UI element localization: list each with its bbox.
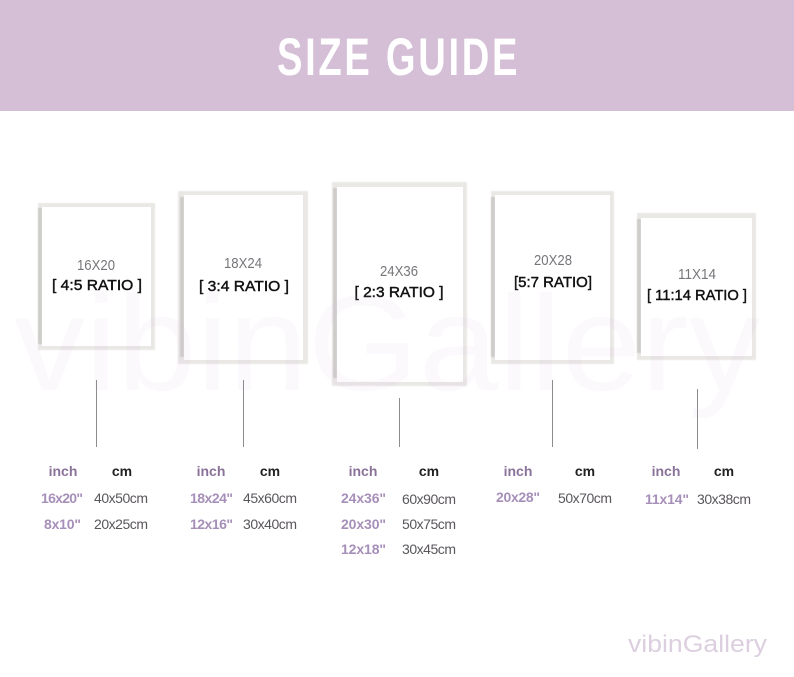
connector line: 11x14 — [696, 389, 698, 449]
size table: 16x20 column: 20x25cm — [94, 516, 148, 532]
size table: 18x24 column: 18x24" — [190, 490, 233, 506]
header banner — [0, 0, 794, 111]
size table: 20x28 column: inch — [504, 463, 532, 479]
size table: 11x14 column — [645, 463, 751, 507]
size table: 11x14 column: inch — [652, 463, 680, 479]
size table: 24x36 column: inch — [349, 463, 377, 479]
size table: 18x24 column: cm — [260, 463, 280, 479]
size table: 24x36 column: cm — [419, 463, 439, 479]
size table: 11x14 column: cm — [714, 463, 734, 479]
connector line: 20x28 — [552, 380, 554, 447]
frame: 11x14 — [637, 213, 756, 360]
size table: 24x36 column: 30x45cm — [402, 541, 456, 557]
size table: 20x28 column — [496, 463, 612, 506]
frame: 11x14: [ 11:14 RATIO ] — [647, 287, 747, 304]
size table: 24x36 column: 50x75cm — [402, 516, 456, 532]
frame: 18x24 — [178, 191, 308, 364]
size table: 20x28 column: cm — [575, 463, 595, 479]
size table: 24x36 column: 20x30" — [341, 516, 386, 532]
title: SIZE GUIDE — [277, 27, 517, 86]
size table: 18x24 column: 45x60cm — [243, 490, 297, 506]
connector line: 18x24 — [242, 380, 244, 447]
connector line: 16x20 — [96, 380, 98, 447]
frame: 24x36: 24X36 — [380, 263, 418, 280]
frame: 18x24: 18X24 — [224, 255, 262, 272]
size table: 24x36 column: 12x18" — [341, 541, 386, 557]
size table: 24x36 column: 60x90cm — [402, 491, 456, 507]
connector line: 24x36 — [398, 398, 400, 447]
frame: 16x20 — [38, 203, 155, 350]
frame: 24x36 — [332, 182, 467, 386]
frame: 16x20: 16X20 — [77, 257, 115, 274]
size table: 16x20 column: 16x20" — [41, 490, 83, 506]
size table: 16x20 column — [41, 463, 148, 532]
size table: 18x24 column — [190, 463, 297, 532]
frame: 20x28: 20X28 — [534, 252, 572, 269]
size table: 16x20 column: cm — [112, 463, 132, 479]
size table: 18x24 column: 12x16" — [190, 516, 233, 532]
size table: 20x28 column: 20x28" — [496, 489, 540, 505]
size table: 20x28 column: 50x70cm — [558, 490, 612, 506]
size table: 18x24 column: 30x40cm — [243, 516, 297, 532]
size table: 24x36 column — [341, 463, 456, 557]
frame: 18x24: [ 3:4 RATIO ] — [199, 278, 289, 295]
size table: 11x14 column: 30x38cm — [697, 491, 751, 507]
size table: 16x20 column: 8x10" — [44, 516, 81, 532]
size table: 16x20 column: 40x50cm — [94, 490, 148, 506]
frame: 20x28 — [491, 191, 614, 364]
size table: 11x14 column: 11x14" — [645, 491, 689, 507]
frame: 11x14: 11X14 — [678, 266, 716, 283]
size table: 16x20 column: inch — [49, 463, 77, 479]
background watermark: vibinGallery — [14, 267, 760, 419]
frame: 20x28: [5:7 RATIO] — [514, 274, 592, 291]
size table: 24x36 column: 24x36" — [341, 490, 386, 506]
frame: 16x20: [ 4:5 RATIO ] — [52, 277, 142, 294]
size table: 18x24 column: inch — [197, 463, 225, 479]
brand logo: vibinGallery — [628, 631, 767, 658]
frame: 24x36: [ 2:3 RATIO ] — [354, 284, 444, 301]
